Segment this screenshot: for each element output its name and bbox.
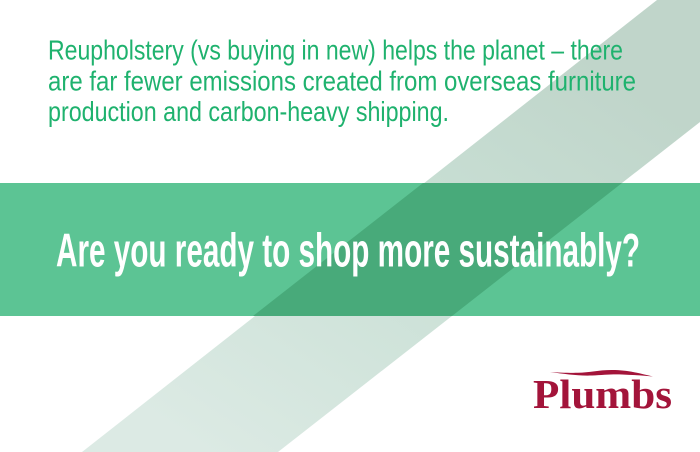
intro text: production and carbon-heavy shipping.: [48, 96, 449, 127]
intro text: [48, 34, 636, 127]
green banner: [0, 183, 700, 316]
logo swoosh: [550, 370, 653, 376]
logo: Plumbs: [533, 370, 672, 417]
logo wordmark: Plumbs: [533, 371, 672, 417]
